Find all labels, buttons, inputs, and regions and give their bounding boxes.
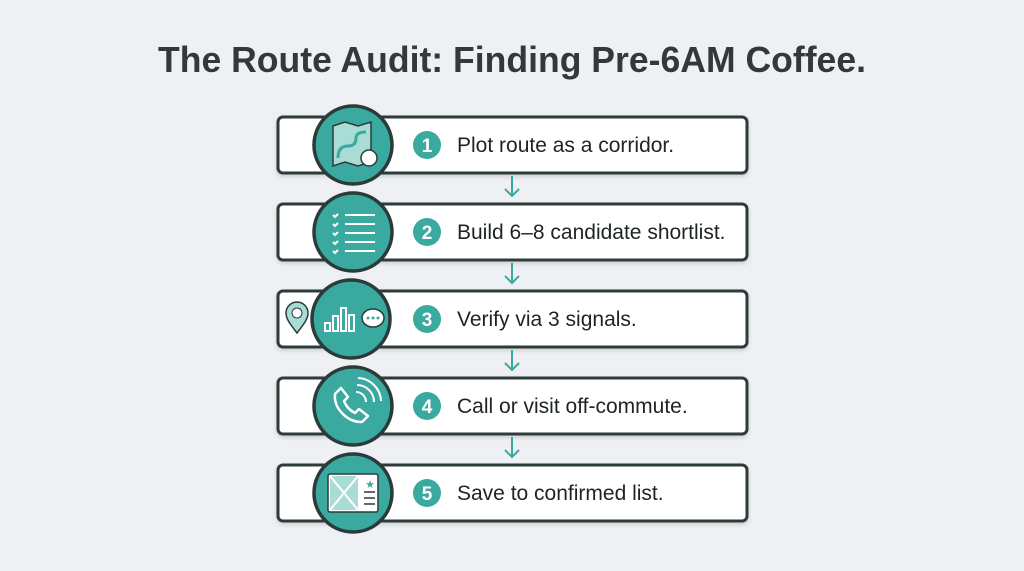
number badge 5: 5 [422, 484, 433, 505]
icon: map route [314, 106, 392, 184]
icon: signals [312, 280, 390, 358]
step text 1: Plot route as a corridor. [457, 134, 674, 157]
icon: saved list [314, 454, 392, 532]
step text 5: Save to confirmed list. [457, 482, 664, 505]
step 4 [278, 367, 747, 445]
number badge 1: 1 [422, 136, 433, 157]
step 1 [278, 106, 747, 184]
number badge 2 [413, 218, 441, 246]
icon: phone [314, 367, 392, 445]
step 2 [278, 193, 747, 271]
number badge 4 [413, 392, 441, 420]
number badge 5 [413, 479, 441, 507]
arrow [505, 350, 519, 370]
icon: checklist [314, 193, 392, 271]
step text 3: Verify via 3 signals. [457, 308, 637, 331]
number badge 1 [413, 131, 441, 159]
arrow [505, 176, 519, 196]
step text 2: Build 6–8 candidate shortlist. [457, 221, 726, 244]
number badge 3: 3 [422, 310, 432, 331]
number badge 3 [413, 305, 441, 333]
icon: map pin [286, 302, 308, 333]
arrow [505, 437, 519, 457]
arrow [505, 263, 519, 283]
step 3 [278, 280, 747, 358]
number badge 4: 4 [422, 397, 433, 418]
icon: saved list: ★ [365, 479, 375, 491]
step text 4: Call or visit off-commute. [457, 395, 688, 418]
title: The Route Audit: Finding Pre-6AM Coffee. [158, 39, 866, 80]
number badge 2: 2 [422, 223, 432, 244]
step 5 [278, 454, 747, 532]
